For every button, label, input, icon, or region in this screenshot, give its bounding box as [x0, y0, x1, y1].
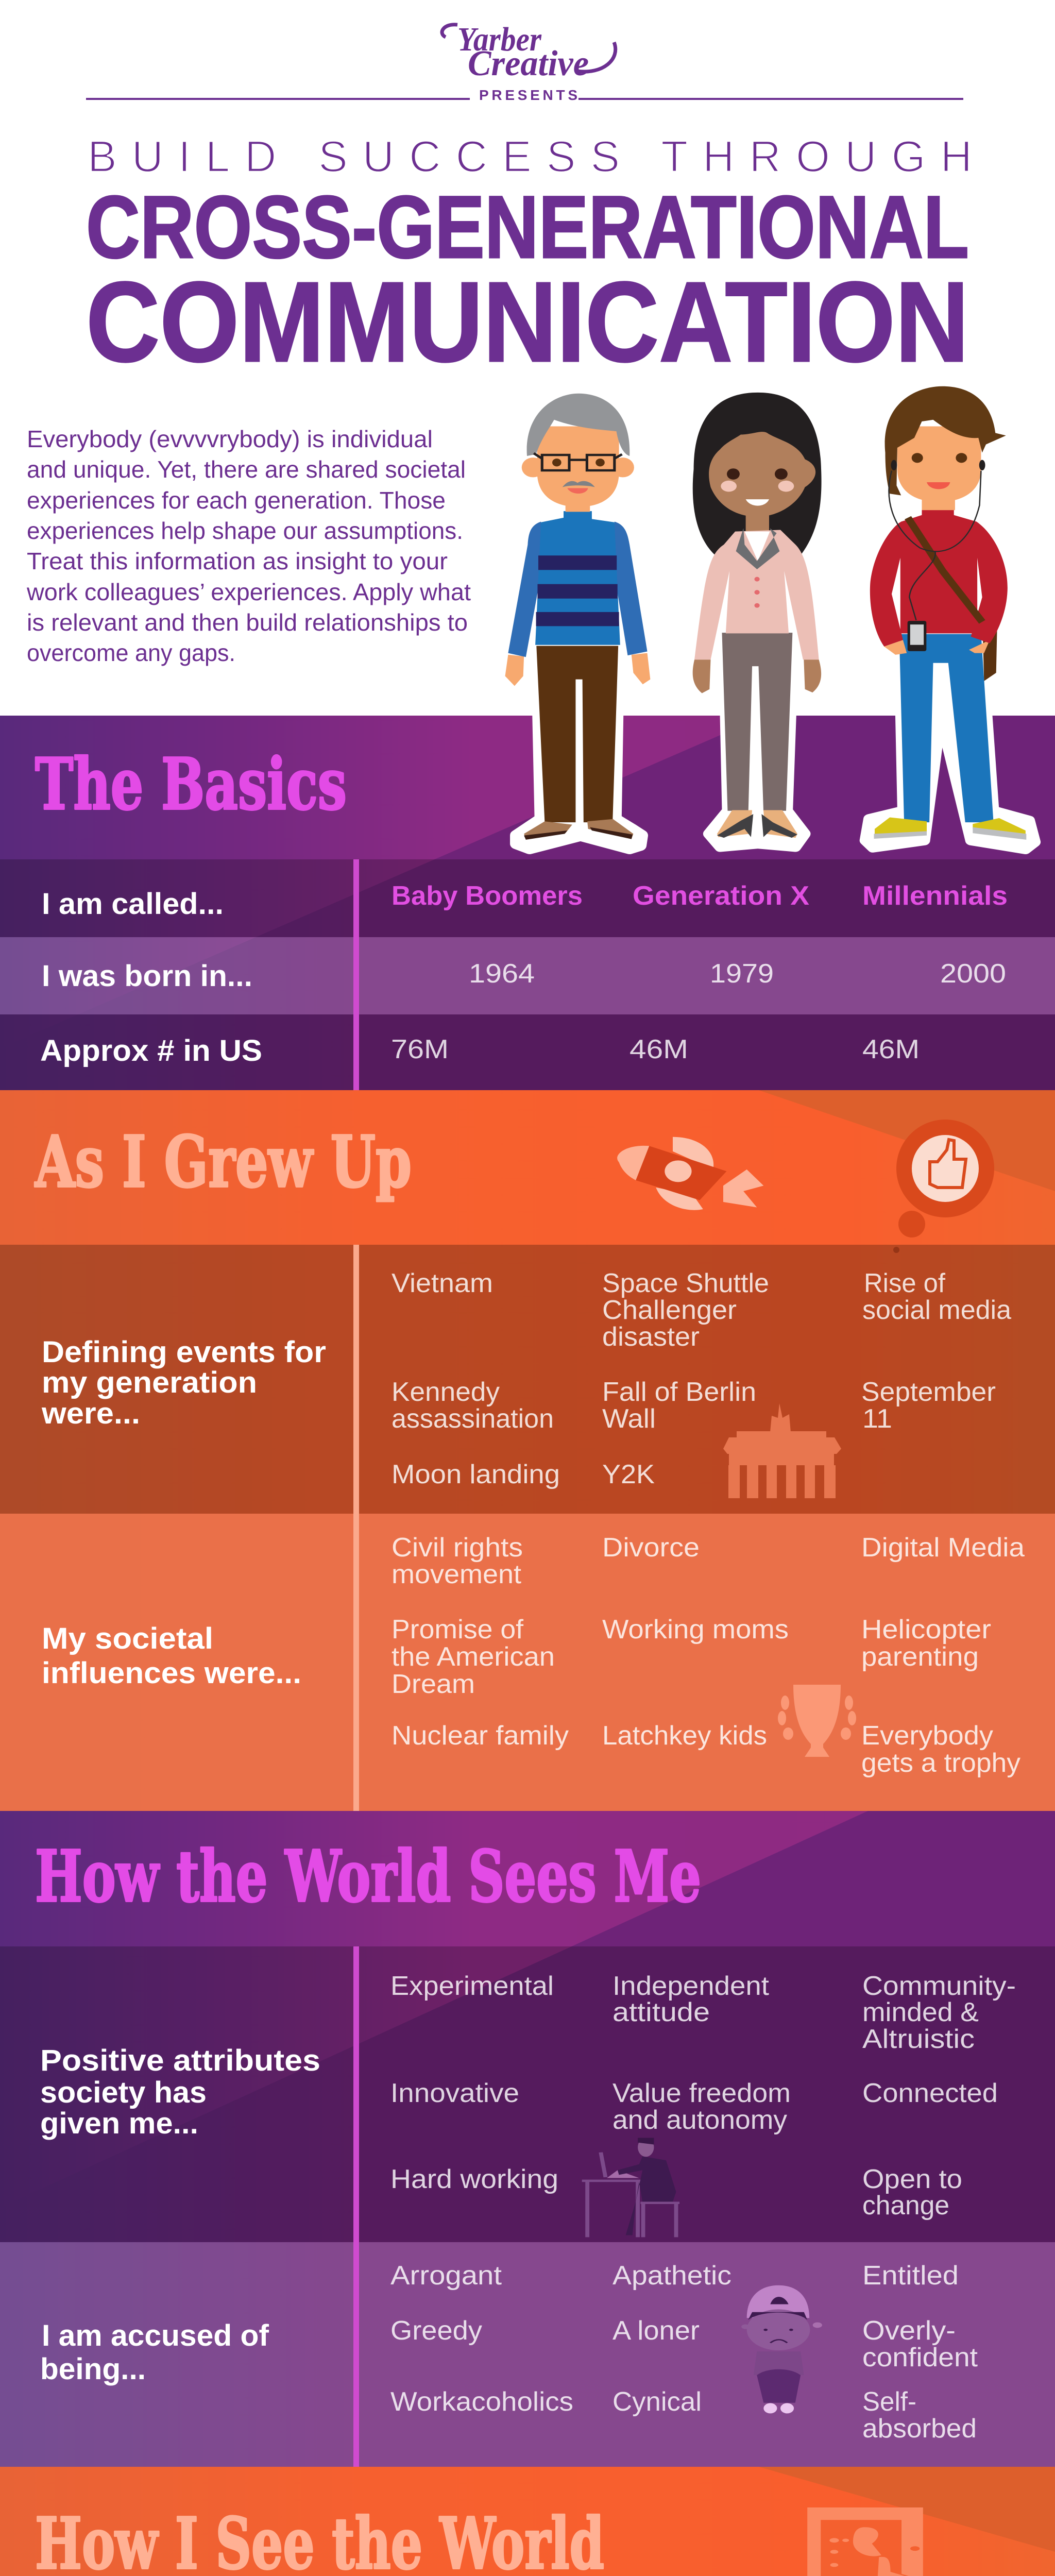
row: societal influences: Nuclear family — [392, 1721, 569, 1751]
row: positive attributes: and autonomy — [612, 2105, 787, 2135]
row: defining events: Kennedy — [392, 1377, 500, 1407]
row: defining events: disaster — [602, 1322, 700, 1352]
title: BUILD SUCCESS THROUGH — [88, 132, 972, 181]
row: Approx number in US: 46M — [862, 1035, 920, 1064]
icon: trophy — [778, 1685, 856, 1757]
row: accused of being: Greedy — [390, 2316, 482, 2346]
row: positive attributes: Altruistic — [862, 2024, 975, 2054]
row: positive attributes — [0, 1946, 1055, 2242]
row: accused of being: Apathetic — [612, 2261, 731, 2291]
row: accused of being: Overly- — [862, 2316, 956, 2346]
icon: man working at desk — [582, 2138, 679, 2237]
row label: being... — [40, 2352, 146, 2386]
row: accused of being: Entitled — [862, 2261, 959, 2291]
row: positive attributes: Community- — [862, 1971, 1016, 2001]
row: defining events: Moon landing — [392, 1460, 560, 1489]
row: defining events: Fall of Berlin — [602, 1377, 756, 1407]
row: societal influences: Latchkey kids — [602, 1721, 767, 1751]
row: positive attributes: Hard working — [390, 2164, 558, 2194]
row: societal influences: Everybody — [861, 1721, 993, 1751]
row: accused of being — [0, 2242, 1055, 2467]
row: Approx number in US: 46M — [629, 1035, 688, 1064]
intro paragraph — [26, 426, 471, 666]
row: societal influences: Dream — [392, 1669, 475, 1699]
row label: My societal — [42, 1622, 213, 1655]
row label: Positive attributes — [40, 2044, 320, 2077]
row: I was born in: 1964 — [469, 959, 535, 989]
title — [86, 132, 972, 385]
row label: I am accused of — [42, 2319, 269, 2352]
intro paragraph: Everybody (evvvvrybody) is individual — [27, 426, 433, 452]
row: positive attributes: change — [862, 2191, 949, 2221]
row: accused of being: Arrogant — [390, 2261, 502, 2291]
row: societal influences: Civil rights — [392, 1533, 523, 1563]
row: societal influences: parenting — [861, 1642, 979, 1672]
row: societal influences: gets a trophy — [861, 1748, 1020, 1778]
character: generation X woman — [693, 393, 822, 847]
row: defining events: Rise of — [864, 1268, 946, 1298]
row: defining events: social media — [862, 1295, 1011, 1325]
row: defining events: assassination — [392, 1404, 554, 1434]
row: societal influences: Promise of — [392, 1615, 524, 1645]
logo: Yarber Creative presents: Yarber — [457, 21, 542, 58]
row: societal influences: Divorce — [602, 1533, 700, 1563]
row: societal influences — [0, 1514, 1055, 1811]
panel: As I Grew Up — [0, 1090, 1055, 1811]
row: positive attributes: Value freedom — [612, 2078, 791, 2108]
title: COMMUNICATION — [86, 258, 969, 385]
row label: society has — [40, 2076, 207, 2109]
row label: given me... — [40, 2107, 198, 2140]
row: I was born in: I was born in... — [42, 959, 252, 993]
row: accused of being: confident — [862, 2343, 978, 2372]
icon: rocket — [617, 1137, 763, 1210]
icon: Brandenburg Gate — [723, 1403, 841, 1498]
row label — [41, 1335, 326, 1430]
row: defining events: Space Shuttle — [602, 1268, 769, 1298]
row: accused of being: Cynical — [612, 2387, 702, 2417]
row label — [40, 2319, 269, 2386]
row: I was born in: 2000 — [940, 959, 1006, 989]
row: defining events: 11 — [862, 1404, 892, 1434]
row: societal influences: Working moms — [602, 1615, 789, 1645]
character: millennial man — [865, 386, 1035, 849]
row label — [40, 2044, 320, 2140]
row: Approx number in US: 76M — [391, 1035, 449, 1064]
row: I am called: I am called... — [42, 887, 224, 921]
row: positive attributes: Connected — [862, 2078, 998, 2108]
row: positive attributes: minded & — [862, 1997, 979, 2027]
illustration: three generation characters — [505, 386, 1035, 849]
character: baby boomer man — [505, 394, 650, 849]
row: defining events: Vietnam — [392, 1268, 493, 1298]
logo: Yarber Creative presents — [86, 21, 963, 103]
intro paragraph: and unique. Yet, there are shared societal — [27, 456, 466, 483]
logo: Yarber Creative presents: PRESENTS — [479, 87, 577, 103]
row: positive attributes: Independent — [612, 1971, 770, 2001]
row label: were... — [41, 1397, 140, 1430]
intro paragraph: Treat this information as insight to your — [27, 548, 448, 574]
row label: Defining events for — [42, 1335, 326, 1369]
row: defining events: Wall — [602, 1404, 656, 1434]
panel: How the World Sees Me — [0, 1811, 1055, 2467]
row: defining events — [0, 1245, 1055, 1514]
row: societal influences: movement — [392, 1560, 522, 1589]
row: Approx number in US — [0, 1014, 1055, 1090]
row: positive attributes: Open to — [862, 2164, 962, 2194]
row: I am called — [0, 859, 1055, 937]
row: defining events: Y2K — [602, 1460, 655, 1489]
row: I am called: Millennials — [862, 881, 1008, 911]
intro paragraph: is relevant and then build relationships to — [27, 609, 468, 636]
intro paragraph: experiences for each generation. Those — [27, 487, 446, 514]
row: accused of being: A loner — [612, 2316, 700, 2346]
row: I was born in — [0, 937, 1055, 1014]
row: I was born in: 1979 — [710, 959, 774, 989]
intro paragraph: work colleagues’ experiences. Apply what — [26, 579, 471, 605]
row: accused of being: Self- — [862, 2387, 916, 2417]
intro paragraph: overcome any gaps. — [27, 639, 235, 666]
heading: As I Grew Up: As I Grew Up — [35, 1121, 412, 1204]
panel: How I See the World — [0, 2467, 1055, 2576]
row: I am called: Baby Boomers — [392, 881, 583, 911]
row label: influences were... — [42, 1656, 301, 1690]
icon: tablet with pac-man and hand — [807, 2507, 923, 2576]
row: positive attributes: Innovative — [390, 2078, 519, 2108]
intro paragraph: experiences help shape our assumptions. — [27, 517, 463, 544]
row: I am called: Generation X — [633, 881, 809, 911]
icon: thought bubble with thumbs up — [893, 1120, 994, 1253]
row: defining events: September — [861, 1377, 996, 1407]
heading: How the World Sees Me: How the World Sees Me — [35, 1835, 701, 1918]
row: societal influences: Digital Media — [861, 1533, 1025, 1563]
panel: The Basics — [0, 716, 1055, 1090]
row: societal influences: Helicopter — [861, 1615, 991, 1645]
icon: sad boy sitting — [741, 2285, 822, 2413]
row label: my generation — [42, 1366, 257, 1399]
row: Approx number in US: Approx # in US — [40, 1034, 262, 1067]
row: defining events: Challenger — [602, 1295, 737, 1325]
row: accused of being: Workacoholics — [390, 2387, 573, 2417]
row label — [42, 1622, 301, 1690]
logo: Yarber Creative presents: Creative — [468, 44, 589, 83]
heading: The Basics: The Basics — [35, 743, 347, 826]
row: societal influences: the American — [392, 1642, 555, 1672]
row: accused of being: absorbed — [862, 2414, 977, 2444]
row: positive attributes: Experimental — [390, 1971, 554, 2001]
row: positive attributes: attitude — [612, 1997, 710, 2027]
